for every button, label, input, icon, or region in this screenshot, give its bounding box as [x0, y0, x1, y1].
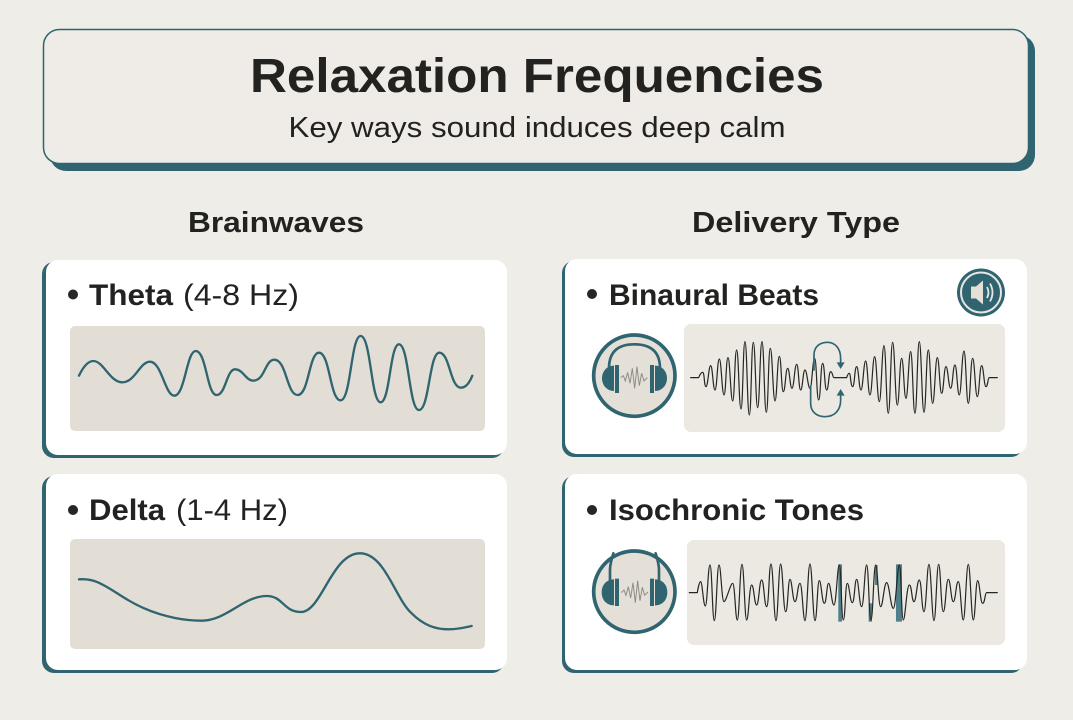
chart: isochronic wave	[687, 540, 1005, 645]
label: Binaural Beats: Binaural Beats	[609, 279, 819, 312]
title: Relaxation Frequencies	[250, 50, 824, 103]
label: Isochronic Tones: Isochronic Tones	[609, 494, 864, 527]
label: Theta (4-8 Hz): (4-8 Hz)	[183, 279, 299, 312]
label: Delta (1-4 Hz): Delta	[89, 494, 165, 527]
chart: theta wave	[70, 326, 485, 431]
panel: Delta	[42, 474, 507, 673]
icon: headphones	[594, 551, 675, 632]
bullet	[68, 505, 78, 515]
bullet	[68, 290, 78, 300]
arrows: beat loop	[811, 342, 845, 417]
tone pulses	[838, 564, 902, 622]
chart: binaural wave	[684, 324, 1005, 432]
panel: Isochronic Tones	[562, 474, 1027, 673]
bullet	[587, 289, 597, 299]
title panel	[44, 30, 1035, 171]
icon: speaker	[957, 268, 1005, 316]
heading: Brainwaves: Brainwaves	[188, 207, 364, 239]
label: Theta (4-8 Hz): Theta	[89, 279, 173, 312]
panel: Binaural Beats	[562, 259, 1027, 457]
bullet	[587, 505, 597, 515]
subtitle: Key ways sound induces deep calm	[288, 112, 786, 144]
waveform line	[689, 564, 997, 621]
heading: Delivery Type: Delivery Type	[692, 207, 900, 239]
label: Theta (4-8 Hz)	[89, 279, 299, 312]
label: Delta (1-4 Hz): (1-4 Hz)	[176, 494, 288, 527]
panel: Theta	[42, 260, 507, 458]
icon: headphones	[594, 335, 675, 416]
label: Delta (1-4 Hz)	[89, 494, 288, 527]
chart: delta wave	[70, 539, 485, 649]
